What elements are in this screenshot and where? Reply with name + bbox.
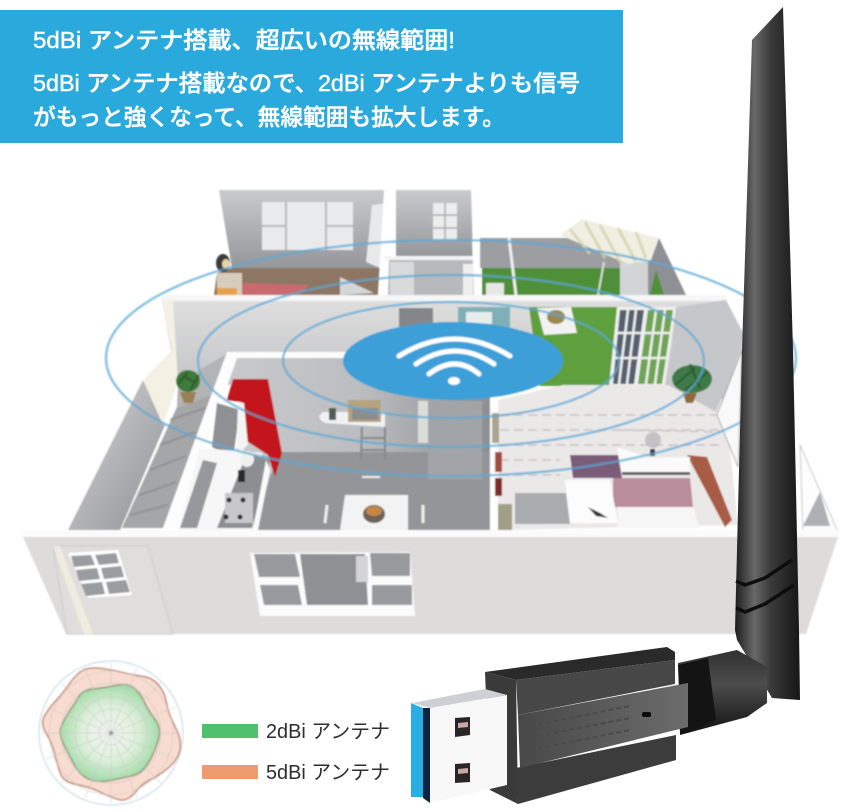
sofa (565, 480, 618, 523)
2dBi pattern (60, 685, 159, 781)
radiation pattern chart (39, 661, 183, 805)
bedroom (214, 190, 389, 295)
front wall (23, 530, 838, 634)
dining table (325, 476, 423, 530)
bathroom (378, 190, 482, 295)
legend: 2dBi: 2dBi アンテナ (266, 721, 390, 743)
refrigerator (227, 379, 282, 477)
rugs (570, 455, 622, 478)
wifi rings (106, 240, 796, 476)
legend: 2dBi (202, 721, 390, 743)
second wall (161, 295, 743, 410)
garden view (529, 307, 676, 386)
back rooms (214, 190, 686, 295)
awning (560, 219, 659, 264)
counter table (319, 400, 385, 460)
plant left (176, 370, 200, 403)
banner heading: 5dBi アンテナ搭載、超広いの無線範囲! (33, 27, 455, 53)
side table (537, 307, 577, 335)
antenna hinge (678, 650, 767, 735)
usb plug (411, 689, 507, 803)
door (53, 546, 173, 634)
window (250, 552, 415, 616)
cabinet (178, 402, 270, 530)
left corridor (68, 300, 228, 530)
wifi icon (343, 322, 563, 400)
banner (0, 10, 623, 143)
plant right (672, 364, 712, 403)
legend: 5dBi (202, 762, 390, 784)
house illustration (23, 190, 838, 634)
legend (202, 721, 390, 784)
adapter body (485, 647, 688, 804)
banner text line 2: がもっと強くなって、無線範囲も拡大します。 (33, 104, 505, 130)
antenna (735, 7, 800, 700)
legend: 5dBi: 5dBi アンテナ (266, 762, 390, 784)
kitchen and dining room (163, 352, 490, 530)
interior door (418, 401, 482, 479)
french door (609, 307, 676, 386)
living room (490, 385, 738, 530)
banner text line 1: 5dBi アンテナ搭載なので、2dBi アンテナよりも信号 (33, 70, 580, 96)
usb antenna adapter (411, 7, 800, 804)
usb slots (455, 717, 470, 737)
5dBi pattern (43, 668, 180, 800)
right wall (668, 300, 838, 532)
garden (480, 219, 686, 295)
